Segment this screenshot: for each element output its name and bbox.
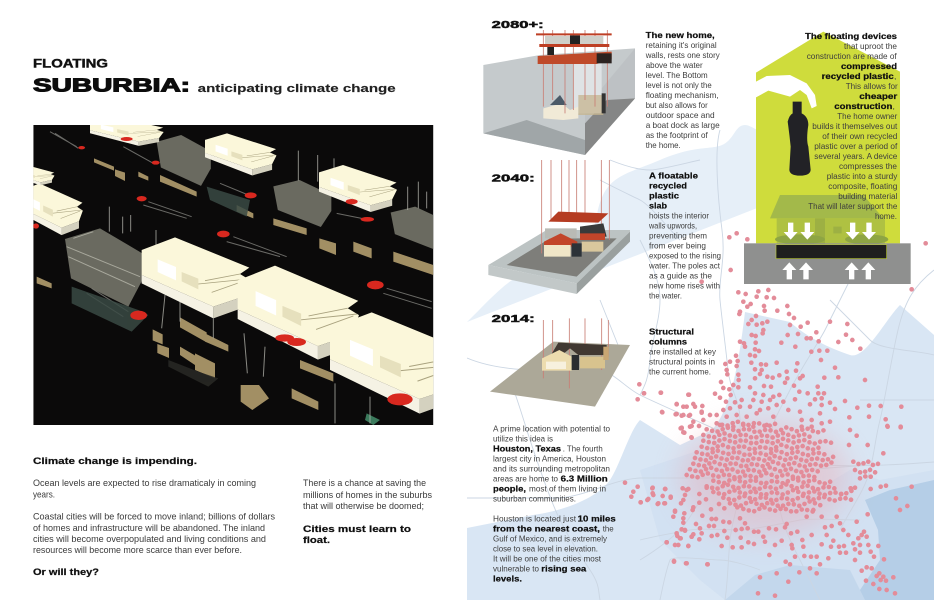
text block: floatable recycled plastic slab: slab	[649, 200, 667, 210]
text block: floatable recycled plastic slab: the water.	[649, 290, 682, 300]
text block: floating devices: construction are made of	[807, 51, 897, 61]
text block: floating devices: of their own recycled	[822, 131, 898, 141]
map: density haze	[681, 420, 849, 536]
text block: floatable recycled plastic slab: from ever being	[649, 240, 706, 250]
diagram: 2080 home above flood box	[483, 30, 635, 155]
text block: Houston, Texas: largest city in America, Houston	[493, 454, 606, 464]
text block: climate change is impending: Climate change is impending.	[33, 455, 197, 466]
text block: Houston, Texas: and its surrounding metropolitan	[493, 464, 610, 474]
text block: climate change is impending: Ocean levels are expected to rise dramaticaly in coming	[33, 478, 256, 488]
text block: floatable recycled plastic slab: exposed to the rising	[649, 250, 721, 260]
text block: floatable recycled plastic slab: as a guide as the	[649, 270, 712, 280]
text block: floating devices: cheaper	[859, 91, 898, 101]
text block: Houston, Texas: from the nearest coast,	[493, 524, 600, 534]
text block: the new home: outdoor space and	[646, 110, 715, 120]
heading: Floating Suburbia title: anticipating climate change	[198, 83, 396, 95]
text block: floatable recycled plastic slab: hoists the interior	[649, 210, 709, 220]
text block: the new home: The new home,	[646, 30, 715, 40]
text block: floating devices: that uproot the	[844, 41, 897, 51]
text block: floating devices: The home owner	[837, 111, 897, 121]
map: low elevation region	[640, 430, 934, 600]
grey water block	[744, 243, 911, 284]
heading: Floating Suburbia title: FLOATING	[33, 57, 108, 70]
diagram: floating device in yellow house	[744, 32, 911, 284]
arrows: downward force	[784, 223, 876, 240]
red boats	[33, 137, 413, 405]
water	[33, 125, 433, 425]
heading: Floating Suburbia title	[33, 57, 396, 96]
map: lower coastal plain	[725, 565, 865, 600]
icon: plastic bottle	[788, 102, 811, 176]
text block: the new home: but also allows for	[646, 100, 708, 110]
diagram: 2040 home being lifted	[488, 160, 630, 294]
text block: structural columns: columns	[649, 336, 687, 346]
text block: Houston, Texas: the	[603, 524, 614, 534]
text block: floatable recycled plastic slab: recycled	[649, 180, 687, 190]
dark green under-structures	[72, 187, 250, 387]
text block: Houston, Texas: Houston is located just	[493, 514, 577, 524]
text block: climate change is impending: Or will they?	[33, 566, 99, 577]
map: road network	[467, 130, 934, 600]
map: mid elevation region	[467, 305, 934, 600]
text block: structural columns	[649, 326, 717, 376]
text block: Houston, Texas: most of them living in	[529, 484, 606, 494]
text block: climate change is impending: years.	[33, 490, 55, 500]
text block: the new home: level is not only the	[646, 80, 712, 90]
text block: floating devices: home.	[875, 211, 897, 221]
text block: floating devices: That will later support the	[808, 201, 897, 211]
text block: Houston, Texas: 10 miles	[578, 514, 616, 524]
text block: floating devices: builds it themselves out	[812, 121, 898, 131]
ghost houses	[65, 135, 445, 307]
text block: cities must learn to float	[303, 478, 432, 545]
floating houses	[13, 117, 465, 414]
text block: floating devices: plastic over a period of	[814, 141, 898, 151]
text block: cities must learn to float: that will otherwise be doomed;	[303, 501, 424, 511]
text block: floating devices: recycled plastic	[822, 71, 894, 81]
text block: structural columns: Structural	[649, 326, 694, 336]
text block: Houston, Texas: areas are home to	[493, 474, 558, 484]
text block: Houston, Texas: It will be one of the cities most	[493, 554, 602, 564]
text block: floating devices: building material	[838, 191, 897, 201]
text block: cities must learn to float: There is a chance at saving the	[303, 478, 426, 488]
dots: north arm	[644, 233, 926, 428]
text block: floatable recycled plastic slab: new home rises with	[649, 280, 720, 290]
text block: Houston, Texas: Houston, Texas	[493, 444, 561, 454]
text block: floating devices: compressed	[841, 61, 897, 71]
text block: the new home: the home.	[646, 140, 681, 150]
water ripples and boat wakes	[50, 132, 432, 317]
arrows: upward force	[782, 262, 875, 279]
text block: Houston, Texas: vulnerable to	[493, 564, 539, 574]
photo: aerial render of floating homes	[33, 125, 434, 425]
map: Houston metropolitan area	[467, 125, 934, 600]
label: 2080+: 2080+:	[492, 19, 544, 31]
guide poles	[109, 151, 427, 423]
text block: the new home: above the water	[646, 60, 703, 70]
text block: the new home: floating mechanism,	[646, 90, 719, 100]
text block: floating devices: ,	[894, 71, 896, 81]
map: coastal water	[860, 480, 934, 600]
text block: floatable recycled plastic slab: water. The poles act	[648, 260, 721, 270]
map: land light region	[468, 125, 756, 322]
text block: Houston, Texas: Gulf of Mexico, and is extremely	[493, 534, 608, 544]
text block: floating devices: composite, floating	[828, 181, 898, 191]
text block: structural columns: the current home.	[649, 366, 711, 376]
submerged structures	[37, 158, 433, 425]
text block: floating devices: ,	[892, 101, 895, 111]
text block: Houston, Texas	[493, 424, 616, 584]
text block: climate change is impending: resources will become more scarce than ever before.	[33, 545, 242, 555]
text block: Houston, Texas: 6.3 Million	[561, 474, 608, 484]
heading: Floating Suburbia title: SUBURBIA:	[33, 75, 190, 96]
text block: climate change is impending	[33, 455, 275, 577]
text block: Houston, Texas: levels.	[493, 574, 522, 584]
text block: cities must learn to float: millions of homes in the suburbs	[303, 490, 432, 500]
text block: Houston, Texas: utilize this idea is	[493, 434, 553, 444]
text block: floating devices: construction	[834, 101, 892, 111]
text block: Houston, Texas: people,	[493, 484, 526, 494]
text block: floating devices: This allows for	[846, 81, 898, 91]
text block: cities must learn to float: float.	[303, 534, 330, 545]
dots: outer scattered	[641, 426, 912, 596]
text block: floating devices: plastic into a sturdy	[827, 171, 898, 181]
text block: floatable recycled plastic slab	[648, 170, 721, 300]
text block: floating devices: The floating devices	[805, 31, 897, 41]
text block: the new home: level. The Bottom	[646, 70, 708, 80]
dots: western edge	[625, 384, 707, 564]
text block: floatable recycled plastic slab: walls upwords,	[648, 220, 697, 230]
text block: Houston, Texas: . The fourth	[563, 444, 603, 454]
text block: the new home: a boat dock as large	[646, 120, 720, 130]
text block: the new home	[645, 30, 720, 150]
text block: cities must learn to float: Cities must learn to	[303, 523, 411, 534]
text block: Houston, Texas: A prime location with potential to	[493, 424, 610, 434]
text block: the new home: as the footprint of	[646, 130, 708, 140]
text block: structural columns: structural points in	[649, 356, 715, 366]
icon: white hand	[756, 75, 817, 108]
label: 2014: 2014:	[492, 313, 535, 325]
black plastic slab	[776, 245, 887, 259]
text block: the new home: retaining it's original	[646, 40, 717, 50]
text block: Houston, Texas: close to sea level in elevation.	[493, 544, 598, 554]
text block: structural columns: are installed at key	[649, 346, 717, 356]
yellow house silhouette	[756, 32, 900, 243]
text block: the new home: walls, rests one story	[645, 50, 720, 60]
text block: Houston, Texas: rising sea	[541, 564, 587, 574]
text block: floatable recycled plastic slab: preventing them	[649, 230, 707, 240]
label: 2040: 2040:	[492, 173, 535, 185]
text block: climate change is impending: of homes and infrastructure will be abandoned. The inland	[33, 523, 265, 533]
dots: dense core	[687, 421, 880, 512]
text block: floating devices: several years. A device	[814, 151, 897, 161]
text block: Houston, Texas: suburban communities.	[493, 494, 576, 504]
text block: floatable recycled plastic slab: A floatable	[649, 170, 698, 180]
text block: climate change is impending: Coastal cities will be forced to move inland; billions of dollars	[33, 512, 275, 522]
text block: climate change is impending: cities will become overpopulated and living conditions and	[33, 534, 266, 544]
map: pink population dots	[625, 233, 926, 596]
text block: floating devices	[805, 31, 898, 221]
icon: green house	[770, 195, 888, 244]
text block: floating devices: compresses the	[839, 161, 897, 171]
text block: floatable recycled plastic slab: plastic	[649, 190, 679, 200]
diagram: 2014 current home with columns	[490, 318, 630, 407]
